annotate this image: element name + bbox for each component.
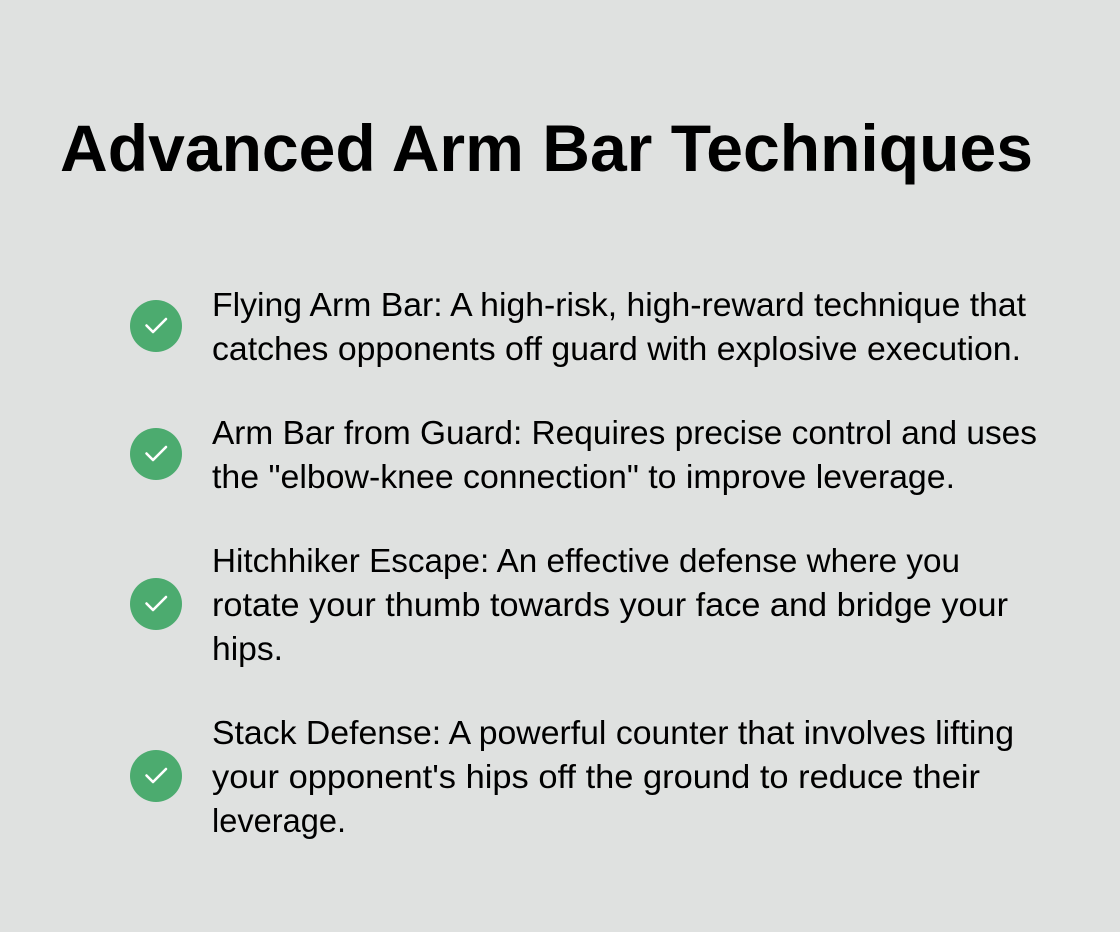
text block: Arm Bar from Guard: Arm Bar from Guard: Requires precise control and uses [212,414,1037,451]
icon: check circle [130,300,182,352]
text block: Flying Arm Bar: catches opponents off guard with explosive execution. [212,330,1021,367]
text block: Stack Defense: your opponent's hips off the ground to reduce their [212,758,980,795]
text block: Flying Arm Bar [212,286,1026,367]
icon: check circle [130,578,182,630]
text block: Flying Arm Bar: Flying Arm Bar: A high-risk, high-reward technique that [212,286,1026,323]
list item: Flying Arm Bar [130,286,1026,367]
text block: Hitchhiker Escape: Hitchhiker Escape: An effective defense where you [212,542,960,579]
text block: Arm Bar from Guard [212,414,1037,495]
text block: Hitchhiker Escape [212,542,1008,667]
text block: Stack Defense: Stack Defense: A powerful counter that involves lifting [212,714,1014,751]
list item: Hitchhiker Escape [130,542,1008,667]
list item: Stack Defense [130,714,1014,839]
title: Advanced Arm Bar Techniques [60,111,1033,185]
text block: Arm Bar from Guard: the "elbow-knee connection" to improve leverage. [212,458,955,495]
icon: check circle [130,428,182,480]
icon: check circle [130,750,182,802]
list item: Arm Bar from Guard [130,414,1037,495]
text block: Stack Defense [212,714,1014,839]
text block: Stack Defense: leverage. [212,802,346,839]
text block: Hitchhiker Escape: rotate your thumb towards your face and bridge your [212,586,1008,623]
text block: Hitchhiker Escape: hips. [212,630,283,667]
